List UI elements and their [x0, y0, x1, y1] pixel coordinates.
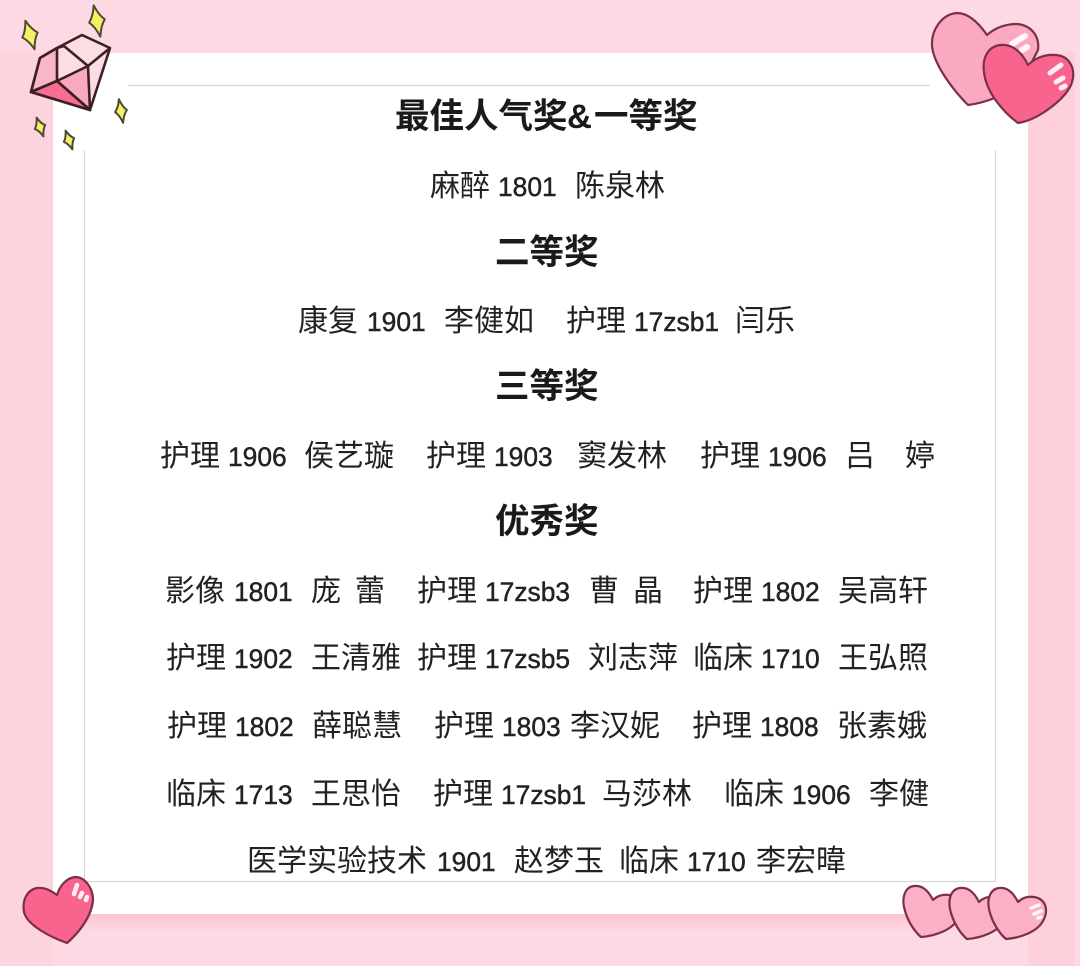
icon: pink diamond	[31, 35, 110, 110]
winners: excellence row 4: 马莎林	[602, 778, 692, 811]
heading: best popularity and first prize: 一等奖	[594, 98, 698, 136]
heading: second prize: 二等奖	[495, 234, 598, 272]
winners: excellence row 1: 17zsb3	[485, 577, 570, 607]
winners: excellence row 1: 护理	[417, 575, 477, 608]
winners: third prize: 吕	[845, 440, 875, 473]
heading: best popularity and first prize: 最佳人气奖	[395, 98, 568, 136]
winners: excellence row 1: 庞	[311, 575, 341, 608]
winners: excellence row 3: 张素娥	[837, 710, 927, 743]
winners: excellence row 5: 赵梦玉	[514, 845, 604, 878]
winners: excellence row 5: 医学实验技术	[247, 845, 427, 878]
winners: third prize: 护理	[426, 440, 486, 473]
winners: excellence row 1: 曹	[589, 575, 619, 608]
heading: best popularity and first prize: &	[567, 98, 592, 136]
winners: third prize: 护理	[700, 440, 760, 473]
winners: second prize: 1901	[367, 307, 426, 337]
winners: excellence row 2: 护理	[166, 642, 226, 675]
icon: sparkle top	[86, 4, 108, 38]
winners: first prize: 陈泉林	[575, 170, 665, 203]
icon: three hearts bottom right	[903, 886, 1046, 939]
winners: excellence row 5: 李宏暐	[756, 845, 846, 878]
winners: second prize: 17zsb1	[634, 307, 719, 337]
winners: third prize: 护理	[160, 440, 220, 473]
icon: sparkle right	[113, 98, 129, 124]
winners: excellence row 4: 临床	[166, 778, 226, 811]
winners: excellence row 3: 1802	[235, 712, 294, 742]
icon: sparkle top left	[18, 18, 42, 52]
winners: excellence row 4: 李健	[869, 778, 929, 811]
winners: excellence row 4: 护理	[433, 778, 493, 811]
winners: excellence row 4: 1906	[792, 780, 851, 810]
winners: excellence row 2: 17zsb5	[485, 644, 570, 674]
winners: excellence row 1: 吴高轩	[838, 575, 928, 608]
winners: excellence row 4: 临床	[724, 778, 784, 811]
winners: third prize: 1906	[768, 442, 827, 472]
winners: excellence row 2: 刘志萍	[588, 642, 678, 675]
winners: third prize: 1903	[494, 442, 553, 472]
winners: excellence row 2: 临床	[693, 642, 753, 675]
winners: excellence row 4: 王思怡	[311, 778, 401, 811]
winners: excellence row 1: 1802	[761, 577, 820, 607]
winners: second prize: 护理	[566, 305, 626, 338]
winners: third prize: 侯艺璇	[304, 440, 394, 473]
winners: second prize: 康复	[298, 305, 358, 338]
winners: excellence row 5: 1901	[437, 847, 496, 877]
winners: excellence row 2: 王清雅	[311, 642, 401, 675]
winners: excellence row 2: 1710	[761, 644, 820, 674]
winners: third prize: 窦发林	[577, 440, 667, 473]
winners: excellence row 1: 护理	[693, 575, 753, 608]
winners: excellence row 2: 护理	[417, 642, 477, 675]
icon: heart bottom left	[24, 877, 93, 943]
winners: excellence row 3: 薛聪慧	[312, 710, 402, 743]
winners: third prize: 婷	[905, 440, 935, 473]
winners: excellence row 1: 晶	[633, 575, 663, 608]
icon: hearts top right	[932, 13, 1073, 123]
winners: excellence row 3: 1808	[760, 712, 819, 742]
heading: third prize: 三等奖	[495, 368, 598, 406]
winners: second prize: 闫乐	[735, 305, 795, 338]
winners: excellence row 1: 影像	[165, 575, 225, 608]
winners: excellence row 3: 李汉妮	[570, 710, 660, 743]
icon: sparkle lower	[60, 129, 78, 151]
winners: third prize: 1906	[228, 442, 287, 472]
winners: first prize: 麻醉	[430, 170, 490, 203]
winners: excellence row 3: 护理	[434, 710, 494, 743]
winners: excellence row 1: 1801	[234, 577, 293, 607]
winners: excellence row 3: 护理	[167, 710, 227, 743]
winners: excellence row 4: 1713	[234, 780, 293, 810]
winners: first prize: 1801	[498, 172, 557, 202]
winners: excellence row 4: 17zsb1	[501, 780, 586, 810]
winners: excellence row 2: 1902	[234, 644, 293, 674]
winners: excellence row 5: 1710	[687, 847, 746, 877]
winners: excellence row 5: 临床	[619, 845, 679, 878]
heading: excellence prize: 优秀奖	[495, 503, 598, 541]
icon: sparkle lower left	[31, 116, 49, 138]
winners: excellence row 2: 王弘照	[838, 642, 928, 675]
winners: excellence row 1: 蕾	[355, 575, 385, 608]
winners: excellence row 3: 护理	[692, 710, 752, 743]
winners: excellence row 3: 1803	[502, 712, 561, 742]
winners: second prize: 李健如	[444, 305, 534, 338]
